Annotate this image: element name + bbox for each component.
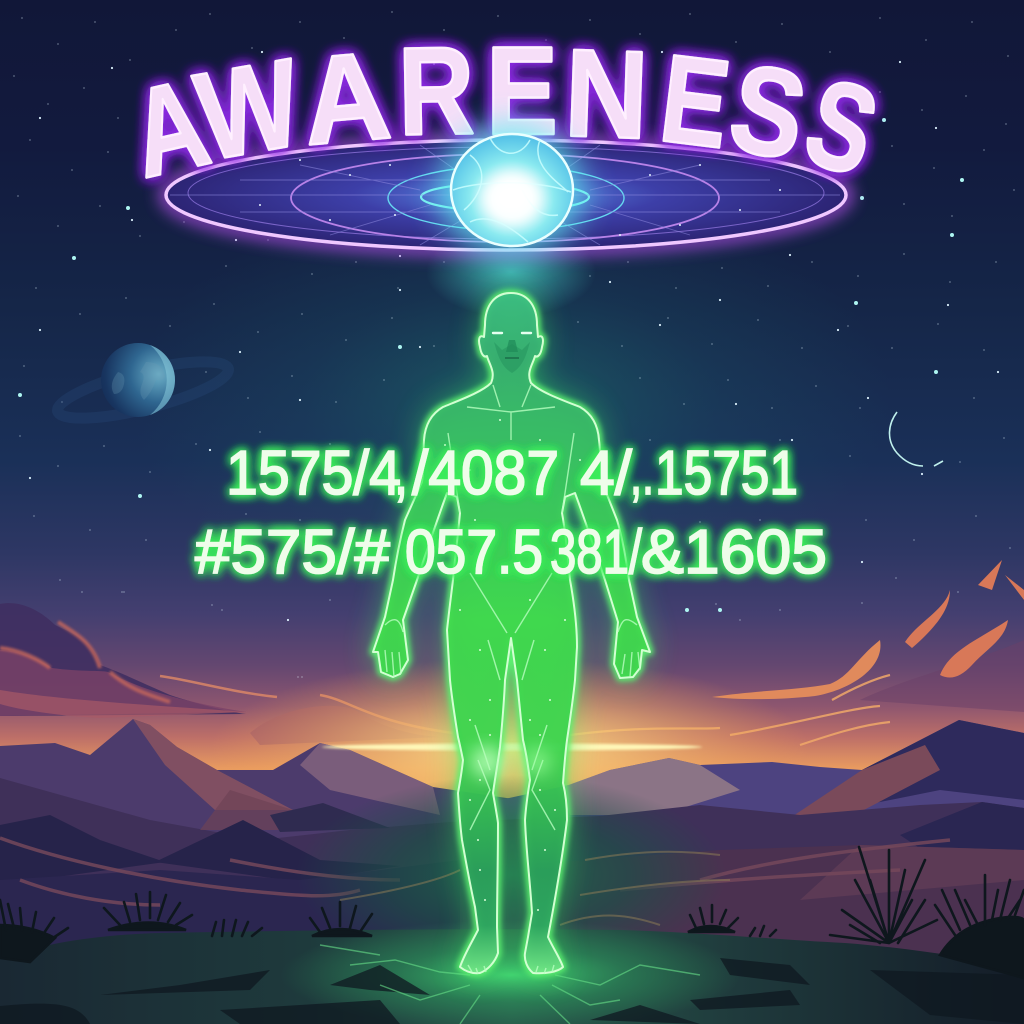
foreground ground with cracks — [0, 920, 1024, 1024]
figure: energy specks — [430, 420, 595, 910]
figure: face — [493, 333, 531, 373]
shrub: far right dense — [935, 875, 1024, 978]
title: AWARENESS: W — [186, 31, 311, 187]
title: AWARENESS: S — [720, 36, 817, 187]
title: AWARENESS: E — [654, 28, 737, 174]
text line 2: 057.5 — [405, 518, 543, 587]
text line 1: /4087 — [412, 439, 559, 508]
text line 1: 4/ — [580, 439, 633, 508]
title: AWARENESS: R — [397, 22, 475, 162]
planet with ring — [53, 343, 233, 430]
title: AWARENESS: S — [791, 51, 892, 203]
glowing numeric text — [195, 439, 827, 587]
title: AWARENESS: E — [486, 20, 558, 161]
text line 1 — [226, 439, 798, 508]
beam of light between orb and head — [426, 227, 596, 317]
shrub: far right large — [830, 847, 937, 943]
clouds at sunset — [0, 560, 1024, 745]
horizon light streak — [322, 744, 702, 750]
shrub: left — [104, 892, 192, 930]
horizon glow — [210, 658, 810, 838]
shrub: centre-left — [310, 902, 372, 936]
glowing orb — [439, 124, 583, 256]
glowing human figure — [373, 293, 650, 974]
text line 2: &1605 — [641, 518, 827, 587]
text line 1: ,. — [630, 439, 654, 508]
desert shrubs — [0, 847, 1024, 978]
shrub: far left — [0, 900, 68, 962]
text line 2 — [195, 518, 827, 587]
title: AWARENESS: A — [118, 52, 220, 204]
text line 2: #575/# — [195, 518, 391, 587]
text line 1: 15751 — [655, 439, 798, 508]
text line 1: , — [394, 439, 408, 508]
mountain ranges — [0, 719, 1024, 1024]
title: AWARENESS — [118, 20, 892, 204]
figure: anatomy lines — [385, 385, 640, 974]
text line 1: 1575/4 — [226, 439, 401, 508]
text line 2: 381/ — [550, 518, 643, 587]
starfield — [14, 12, 1014, 677]
title: AWARENESS: N — [563, 23, 650, 165]
ring disc around the orb — [165, 140, 847, 250]
shrub: centre-right — [688, 905, 738, 932]
crescent moon — [889, 412, 943, 466]
title: AWARENESS: A — [297, 24, 395, 171]
